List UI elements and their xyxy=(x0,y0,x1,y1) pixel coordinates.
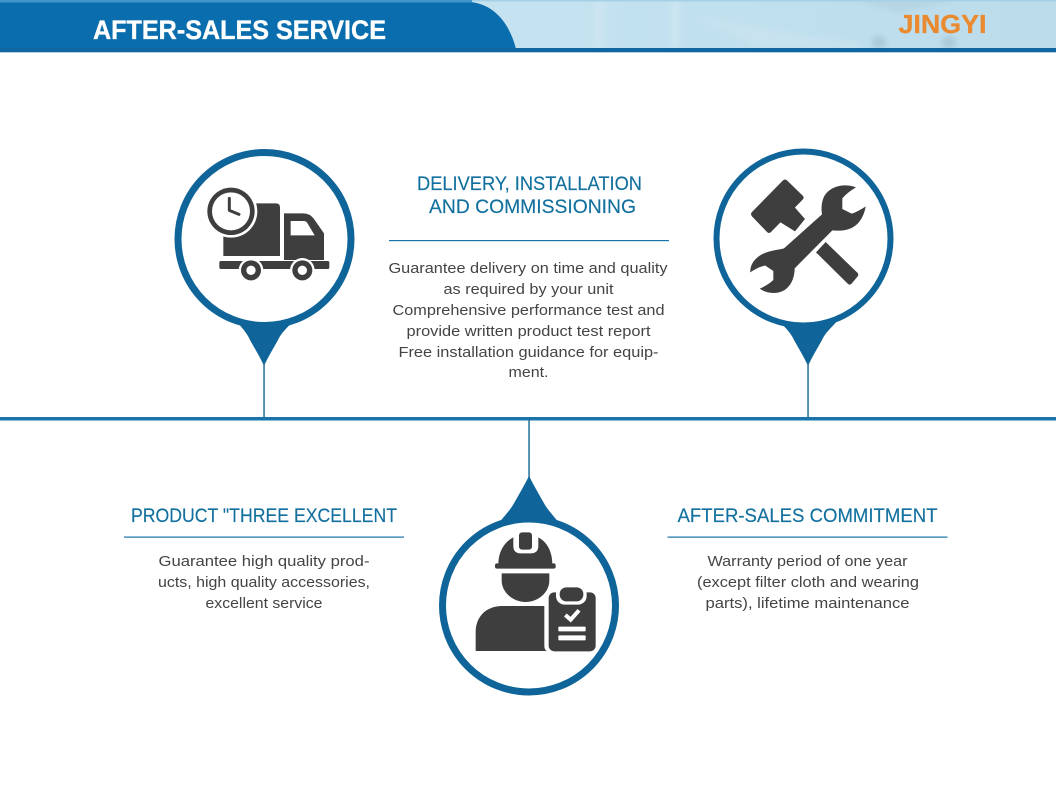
icon: engineer with clipboard xyxy=(476,532,596,651)
body: delivery: as required by your unit xyxy=(444,282,614,298)
text block: delivery, installation and commissioning xyxy=(388,174,669,381)
body: delivery: provide written product test report xyxy=(406,324,650,340)
body: product: excellent service xyxy=(206,596,322,612)
body: commitment: parts), lifetime maintenance xyxy=(706,596,910,612)
body: delivery: Comprehensive performance test and xyxy=(392,303,664,319)
timeline xyxy=(0,417,1056,420)
heading: commitment: AFTER-SALES COMMITMENT xyxy=(678,506,938,527)
heading: delivery: DELIVERY, INSTALLATION xyxy=(417,174,642,195)
body: product: ucts, high quality accessories, xyxy=(158,575,370,591)
body: commitment: (except filter cloth and wearing xyxy=(697,575,919,591)
header banner xyxy=(0,0,1056,52)
heading: product: PRODUCT "THREE EXCELLENT xyxy=(131,506,397,527)
body: product xyxy=(158,554,370,612)
icon: truck with clock xyxy=(205,185,329,283)
heading: delivery: AND COMMISSIONING xyxy=(429,197,636,218)
title: AFTER-SALES SERVICE xyxy=(93,15,386,45)
text block: after-sales commitment xyxy=(668,506,948,612)
body: delivery: Guarantee delivery on time and quality xyxy=(388,261,668,277)
body: commitment: Warranty period of one year xyxy=(708,554,908,570)
body: product: Guarantee high quality prod- xyxy=(158,554,370,570)
body: delivery xyxy=(388,261,668,381)
marker: delivery truck xyxy=(178,152,351,418)
logo: JINGYI xyxy=(898,9,986,39)
marker: tools xyxy=(716,152,890,418)
body: commitment xyxy=(697,554,919,612)
icon: hammer and wrench xyxy=(750,179,866,293)
body: delivery: Free installation guidance for equip- xyxy=(398,345,659,361)
body: delivery: ment. xyxy=(508,365,548,381)
text block: product three excellent xyxy=(124,506,404,612)
heading: delivery xyxy=(417,174,642,218)
marker: engineer xyxy=(442,419,616,692)
